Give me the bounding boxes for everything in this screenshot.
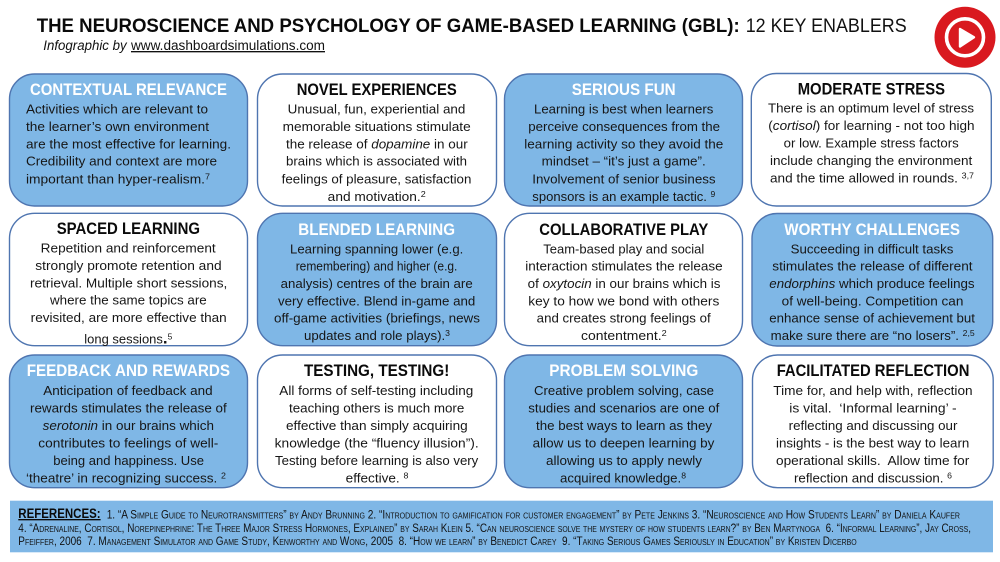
- text: spaced learning body: 5: [168, 331, 173, 341]
- text: moderate stress body: There is an optimum level of stress: [768, 101, 975, 116]
- text: serious fun body: perceive consequences from the: [528, 119, 720, 134]
- text: collaborative play body: 2: [662, 328, 667, 338]
- heading: collaborative play: COLLABORATIVE PLAY: [539, 221, 708, 239]
- text: worthy challenges body: Succeeding in difficult tasks: [791, 241, 954, 256]
- text: feedback and rewards body: ‘theatre’ in recognizing success.: [26, 470, 210, 485]
- panel: blended learning: [258, 213, 496, 346]
- panel: serious fun: [504, 74, 742, 206]
- text: reference list: [18, 509, 971, 548]
- text: worthy challenges body: enhance sense of achievement but: [769, 311, 975, 326]
- heading: feedback and rewards: FEEDBACK AND REWARDS: [27, 362, 230, 380]
- text: worthy challenges body: make sure there are “no losers”.: [771, 328, 956, 343]
- text: serious fun body: [524, 101, 723, 204]
- panel: facilitated reflection: [752, 355, 993, 488]
- text: facilitated reflection body: Time for, and help with, reflection: [773, 383, 973, 398]
- text: testing, testing body: [275, 383, 479, 485]
- text: facilitated reflection body: 6: [947, 470, 952, 480]
- text: testing, testing body: effective.: [346, 470, 397, 485]
- text: testing, testing body: knowledge (the “fluency illusion”).: [275, 435, 479, 450]
- text: worthy challenges body: [769, 241, 975, 343]
- text: novel experiences body: 2: [421, 189, 426, 199]
- text: serious fun body: Involvement of senior business: [532, 171, 716, 186]
- text: feedback and rewards body: being and happiness. Use: [53, 453, 204, 468]
- heading: moderate stress: MODERATE STRESS: [798, 80, 945, 98]
- text: novel experiences body: [282, 101, 471, 204]
- heading: serious fun: SERIOUS FUN: [572, 81, 676, 99]
- text: facilitated reflection body: is vital. ‘Informal learning’ -: [789, 401, 957, 416]
- title: THE NEUROSCIENCE AND PSYCHOLOGY OF GAME-BASED LEARNING (GBL):: [37, 16, 740, 37]
- text: blended learning body: updates and role plays).: [304, 328, 443, 343]
- text: novel experiences body: feelings of pleasure, satisfaction: [282, 171, 471, 186]
- text: serious fun body: mindset – “it’s just a game”.: [542, 154, 706, 169]
- panel: novel experiences: [258, 74, 496, 206]
- text: contextual relevance body: Activities which are relevant to: [26, 101, 208, 116]
- text: spaced learning body: [30, 240, 227, 347]
- text: novel experiences body: brains which is associated with: [286, 154, 467, 169]
- text: problem solving body: [528, 383, 720, 485]
- heading: worthy challenges: WORTHY CHALLENGES: [784, 221, 960, 239]
- heading: blended learning: BLENDED LEARNING: [298, 221, 455, 239]
- text: collaborative play body: and creates strong feelings of: [537, 311, 711, 326]
- subtitle: [43, 38, 325, 53]
- text: problem solving body: allow us to deepen learning by: [533, 435, 715, 450]
- text: facilitated reflection body: operational skills. Allow time for: [776, 453, 970, 468]
- text: serious fun body: 9: [711, 189, 716, 199]
- text: testing, testing body: teaching others is much more: [289, 401, 464, 416]
- panel: feedback and rewards: [10, 355, 248, 488]
- text: blended learning body: very effective. Blend in-game and: [278, 293, 475, 308]
- text: feedback and rewards body: contributes to feelings of well-: [38, 435, 218, 450]
- text: worthy challenges body: of well-being. Competition can: [782, 293, 963, 308]
- text: contextual relevance body: 7: [205, 171, 210, 181]
- text: blended learning body: Learning spanning lower (e.g.: [290, 241, 463, 256]
- text: novel experiences body: and motivation.: [328, 189, 416, 204]
- text: contextual relevance body: [26, 101, 231, 186]
- text: spaced learning body: revisited, are more effective than: [31, 310, 227, 325]
- text: reference list: Pfeiffer, 2006 7. Management Simulator and Game Study, Kenworthy and Wong, 2005 8. “How we learn” by Benedict Carey 9. “Taking Serious Games Seriously in Education” by Kristen Dicerbo: [18, 536, 857, 548]
- panel: problem solving: [504, 355, 742, 488]
- text: blended learning body: remembering) and higher (e.g.: [296, 259, 457, 274]
- text: serious fun body: sponsors is an example tactic.: [532, 189, 706, 204]
- text: facilitated reflection body: insights - is the best way to learn: [776, 435, 969, 450]
- text: feedback and rewards body: Anticipation of feedback and: [43, 383, 213, 398]
- text: collaborative play body: [525, 241, 723, 343]
- text: novel experiences body: the release of dopamine in our: [286, 136, 468, 151]
- icon: red play button logo: [934, 7, 996, 68]
- subtitle: Infographic by: [43, 38, 128, 53]
- heading: testing, testing: TESTING, TESTING!: [304, 362, 449, 380]
- text: feedback and rewards body: serotonin in our brains which: [43, 418, 214, 433]
- panel: collaborative play: [504, 213, 742, 346]
- text: serious fun body: Learning is best when learners: [534, 101, 714, 116]
- text: spaced learning body: retrieval. Multiple short sessions,: [30, 275, 227, 290]
- text: facilitated reflection body: reflecting and discussing our: [789, 418, 958, 433]
- text: worthy challenges body: endorphins which produce feelings: [769, 276, 975, 291]
- text: novel experiences body: Unusual, fun, experiential and: [288, 101, 465, 116]
- text: collaborative play body: contentment.: [581, 328, 656, 343]
- text: spaced learning body: long sessions.: [84, 328, 168, 347]
- heading: spaced learning: SPACED LEARNING: [57, 220, 200, 238]
- text: problem solving body: studies and scenarios are one of: [528, 401, 720, 416]
- text: problem solving body: acquired knowledge.: [560, 470, 679, 485]
- text: worthy challenges body: 2,5: [963, 328, 975, 338]
- text: blended learning body: off-game activities (briefings, news: [274, 311, 481, 326]
- panel: worthy challenges: [752, 214, 993, 346]
- text: worthy challenges body: stimulates the release of different: [772, 259, 973, 274]
- text: collaborative play body: key to how we bond with others: [528, 293, 720, 308]
- text: collaborative play body: interaction stimulates the release: [525, 259, 723, 274]
- panel: contextual relevance: [10, 74, 248, 206]
- text: blended learning body: [274, 241, 481, 343]
- text: spaced learning body: where the same topics are: [49, 293, 207, 308]
- heading: references: REFERENCES:: [18, 506, 101, 521]
- text: moderate stress body: [768, 101, 975, 186]
- text: moderate stress body: 3,7: [962, 170, 974, 180]
- text: feedback and rewards body: rewards stimulates the release of: [30, 401, 227, 416]
- panel: moderate stress: [751, 74, 991, 206]
- heading: contextual relevance: CONTEXTUAL RELEVANCE: [30, 81, 227, 99]
- heading: problem solving: PROBLEM SOLVING: [549, 362, 698, 380]
- text: contextual relevance body: Credibility and context are more: [26, 154, 217, 169]
- panel: spaced learning: [10, 213, 248, 347]
- text: contextual relevance body: are the most effective for learning.: [26, 136, 231, 151]
- heading: novel experiences: NOVEL EXPERIENCES: [297, 81, 457, 99]
- panel: references: [10, 501, 993, 552]
- text: contextual relevance body: important than hyper-realism.: [26, 171, 195, 186]
- text: facilitated reflection body: reflection and discussion.: [794, 470, 940, 485]
- text: testing, testing body: 8: [403, 470, 409, 480]
- text: moderate stress body: include changing the environment: [770, 153, 973, 168]
- text: problem solving body: 8: [681, 470, 686, 480]
- text: testing, testing body: Testing before learning is also very: [275, 453, 479, 468]
- text: blended learning body: 3: [445, 328, 450, 338]
- text: feedback and rewards body: [26, 383, 227, 485]
- text: problem solving body: Creative problem solving, case: [534, 383, 714, 398]
- panel: testing, testing: [258, 355, 496, 488]
- text: problem solving body: the best ways to learn as they: [536, 418, 713, 433]
- text: blended learning body: analysis) centres of the brain are: [281, 276, 473, 291]
- text: collaborative play body: of oxytocin in our brains which is: [528, 276, 721, 291]
- text: moderate stress body: and the time allowed in rounds.: [770, 170, 950, 186]
- text: moderate stress body: or low. Example stress factors: [784, 136, 959, 150]
- text: moderate stress body: (cortisol) for learning - not too high: [768, 118, 975, 133]
- subtitle: www.dashboardsimulations.com: [130, 38, 325, 53]
- text: testing, testing body: All forms of self-testing including: [279, 383, 473, 398]
- text: serious fun body: learning activity so they avoid the: [524, 136, 723, 151]
- text: problem solving body: allowing us to apply newly: [546, 453, 703, 468]
- text: contextual relevance body: the learner’s own environment: [26, 119, 209, 134]
- title: 12 KEY ENABLERS: [746, 16, 907, 37]
- text: collaborative play body: Team-based play and social: [543, 241, 704, 256]
- text: testing, testing body: effective than simply acquiring: [286, 418, 468, 433]
- text: spaced learning body: strongly promote retention and: [35, 258, 222, 273]
- text: facilitated reflection body: [773, 383, 973, 485]
- text: spaced learning body: Repetition and reinforcement: [41, 240, 216, 255]
- heading: facilitated reflection: FACILITATED REFLECTION: [777, 362, 969, 380]
- text: novel experiences body: memorable situations stimulate: [283, 119, 471, 134]
- text: feedback and rewards body: 2: [221, 470, 226, 480]
